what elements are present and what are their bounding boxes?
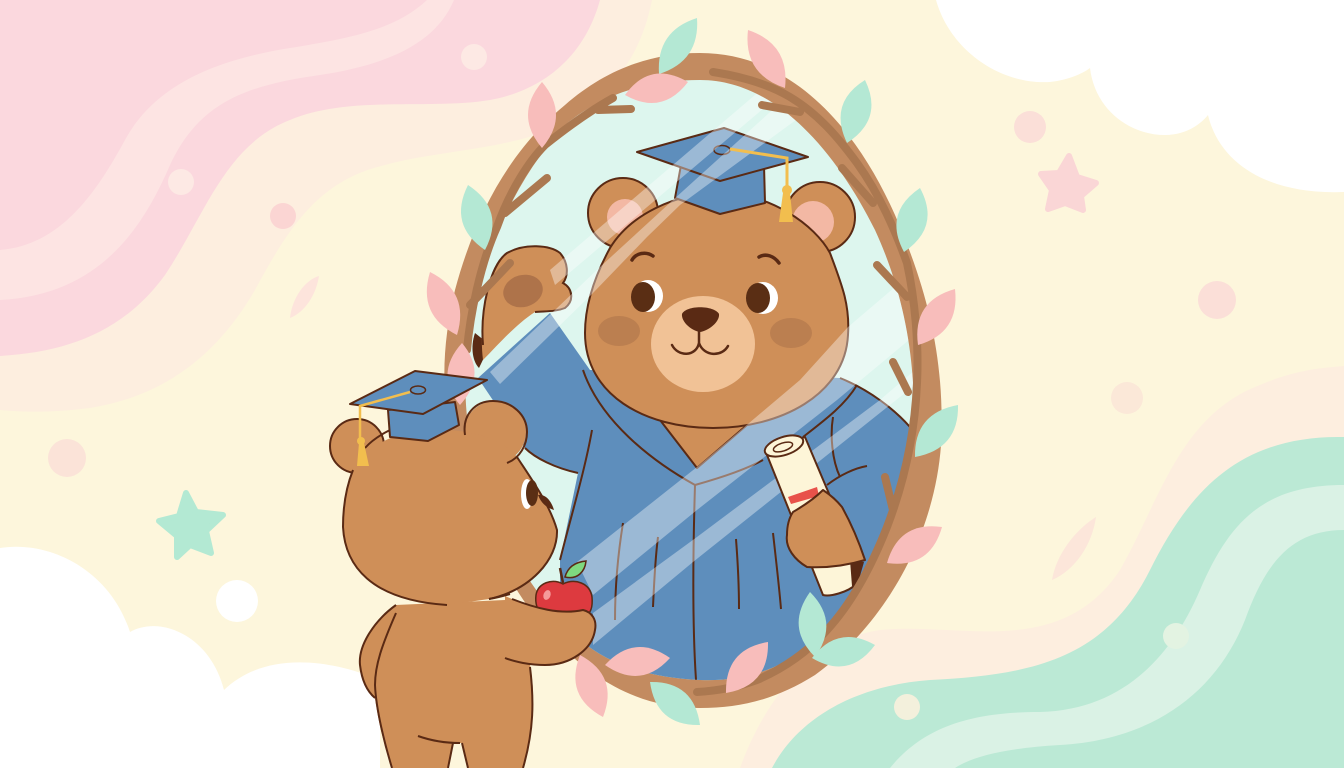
- mirror reflection contents: [472, 94, 913, 680]
- icon: mint star: [159, 493, 223, 557]
- mirror glare: [490, 65, 915, 645]
- mirror: [444, 53, 950, 708]
- mirror bear: head: [585, 178, 855, 428]
- front bear: body and legs: [360, 600, 533, 768]
- leaves around the mirror: [427, 18, 958, 725]
- icon: clouds top-right: [936, 0, 1344, 192]
- front bear: ears: [330, 401, 526, 473]
- mirror glass: [465, 80, 913, 680]
- mirror bear: raised paw: [472, 246, 571, 368]
- mirror bear: graduation cap: [637, 128, 808, 214]
- front bear: head: [343, 401, 557, 605]
- front bear seen from behind: [330, 371, 595, 768]
- panel: mint waves bottom-right: [740, 366, 1344, 768]
- icon: clouds bottom-left: [0, 547, 380, 768]
- mirror frame: [444, 53, 942, 708]
- front bear: apple: [536, 561, 592, 616]
- mirror bear: gown: [478, 313, 910, 680]
- icon: pink star: [1041, 156, 1096, 210]
- panel: pink waves top-left: [0, 0, 652, 412]
- mirror bear: cap tassel: [730, 149, 793, 222]
- branches on frame: [467, 72, 918, 692]
- mirror bear: diploma and paw: [762, 431, 867, 595]
- decorative dots: [48, 111, 1236, 622]
- front bear: graduation cap: [350, 371, 487, 466]
- front bear: arm: [489, 594, 595, 665]
